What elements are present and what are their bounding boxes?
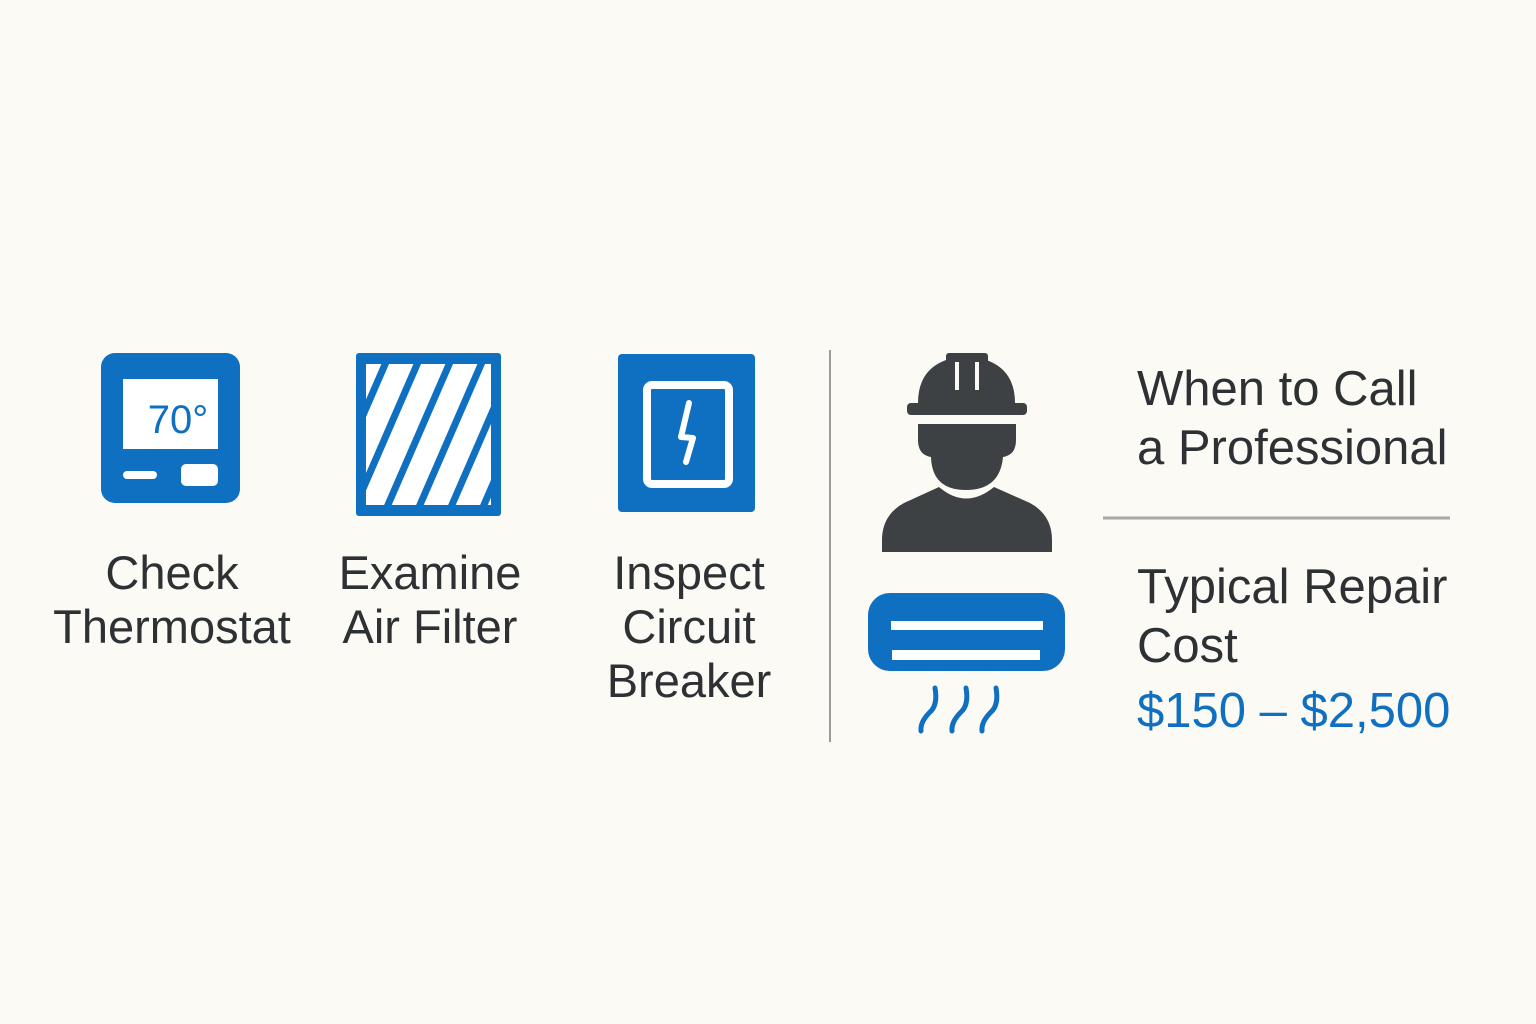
label: inspect circuit breaker: Circuit [622,600,756,653]
label: check thermostat: Thermostat [53,600,291,653]
icon: thermostat [101,353,240,503]
label: examine air filter: Air Filter [343,600,517,653]
label: examine air filter [339,546,521,653]
label: inspect circuit breaker [607,546,771,707]
heading: when to call a professional: a Professional [1137,421,1448,475]
icon: air conditioner [868,593,1065,731]
label: examine air filter: Examine [339,546,521,599]
text: typical repair cost: Typical Repair [1137,560,1447,614]
icon: air filter [356,353,501,516]
icon: worker [882,353,1052,552]
heading: when to call a professional [1137,362,1448,475]
text: typical repair cost [1137,560,1447,673]
separator line [1103,516,1450,520]
heading: when to call a professional: When to Call [1137,362,1418,416]
divider [829,350,831,742]
label: check thermostat: Check [105,546,239,599]
icon: thermostat: 70° [148,398,208,442]
text: cost range: $150 – $2,500 [1137,684,1450,738]
icon: circuit breaker [618,354,755,512]
label: inspect circuit breaker: Inspect [613,546,765,599]
label: check thermostat [53,546,291,653]
text: typical repair cost: Cost [1137,619,1238,673]
label: inspect circuit breaker: Breaker [607,654,771,707]
